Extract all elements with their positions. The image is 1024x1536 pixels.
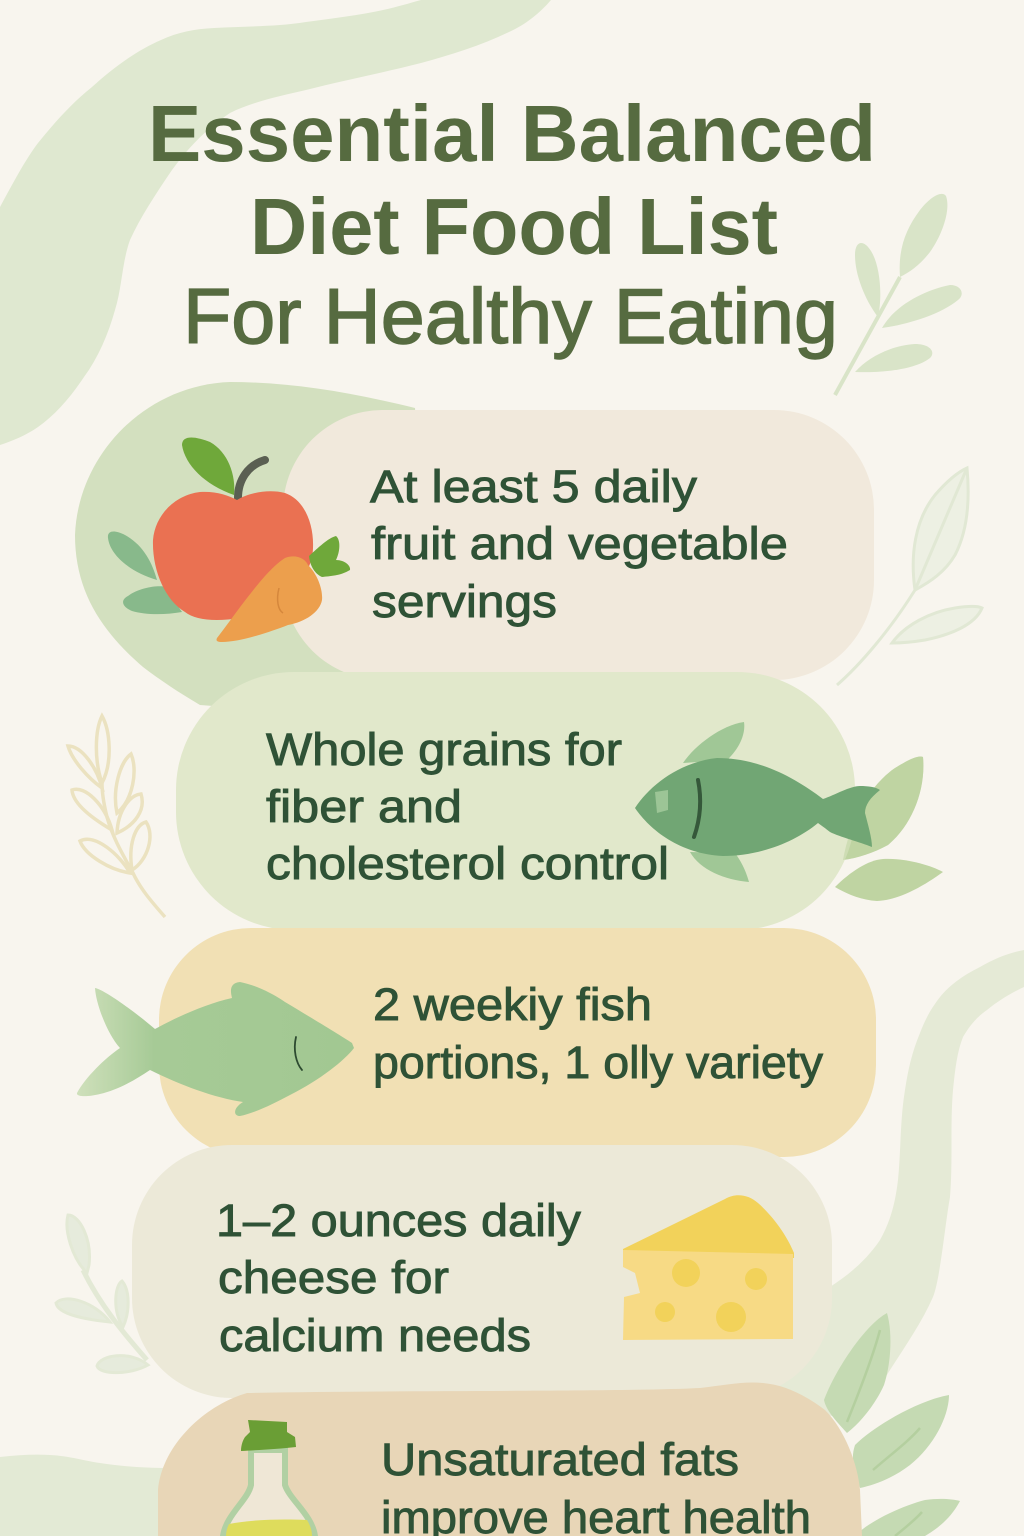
panel: fruit and vegetable servings	[75, 382, 874, 720]
text: cheese: calcium needs	[219, 1310, 531, 1361]
decorative sprig: lower left	[56, 1215, 148, 1373]
icon: oil bottle	[223, 1420, 315, 1536]
text: cheese: cheese for	[218, 1252, 449, 1303]
beige pill	[132, 1145, 832, 1398]
text: whole grains: Whole grains for	[266, 724, 622, 775]
background swoosh: top left	[0, 0, 551, 445]
text: fruit and vegetable servings: fruit and vegetable	[371, 518, 788, 569]
title	[148, 89, 876, 360]
green pill	[176, 672, 855, 930]
icon: apple	[108, 437, 313, 620]
text: whole grains: fiber and	[266, 781, 462, 832]
text: whole grains	[266, 724, 669, 889]
panel: cheese	[132, 1145, 832, 1398]
text: unsaturated fats: Unsaturated fats	[381, 1434, 739, 1485]
title: For Healthy Eating	[183, 272, 838, 360]
text: weekly fish: 2 weekiy fish	[373, 979, 652, 1030]
decorative leaves: bottom right	[824, 1313, 960, 1536]
leaves behind fish	[835, 757, 943, 901]
text: fruit and vegetable servings	[370, 461, 788, 627]
icon: cheese	[623, 1195, 794, 1340]
background swoosh: bottom left	[0, 1455, 170, 1536]
panel: unsaturated fats	[158, 1382, 862, 1536]
text: weekly fish: portions, 1 olly variety	[373, 1037, 824, 1088]
text: whole grains: cholesterol control	[266, 838, 669, 889]
panel: whole grains	[176, 672, 943, 930]
cream pill	[283, 410, 874, 680]
green backdrop behind fruit	[75, 382, 420, 720]
text: weekly fish	[373, 979, 824, 1088]
title: Diet Food List	[250, 182, 778, 271]
tan pill	[158, 1382, 862, 1536]
icon: fish	[77, 982, 354, 1116]
decorative outline sprig: right	[837, 468, 982, 685]
background swoosh: lower right	[760, 950, 1024, 1420]
yellow pill	[159, 928, 876, 1157]
panel: weekly fish	[77, 928, 876, 1157]
text: cheese	[216, 1195, 582, 1361]
decorative wheat sprig: left	[68, 716, 165, 917]
title: Essential Balanced	[148, 89, 876, 178]
text: fruit and vegetable servings: servings	[372, 576, 557, 627]
text: unsaturated fats	[381, 1434, 811, 1536]
icon: carrot	[217, 536, 350, 642]
text: fruit and vegetable servings: At least 5 daily	[370, 461, 698, 512]
decorative sprig: top right	[835, 194, 962, 395]
text: cheese: 1–2 ounces daily	[216, 1195, 582, 1246]
icon: fish	[635, 722, 923, 882]
